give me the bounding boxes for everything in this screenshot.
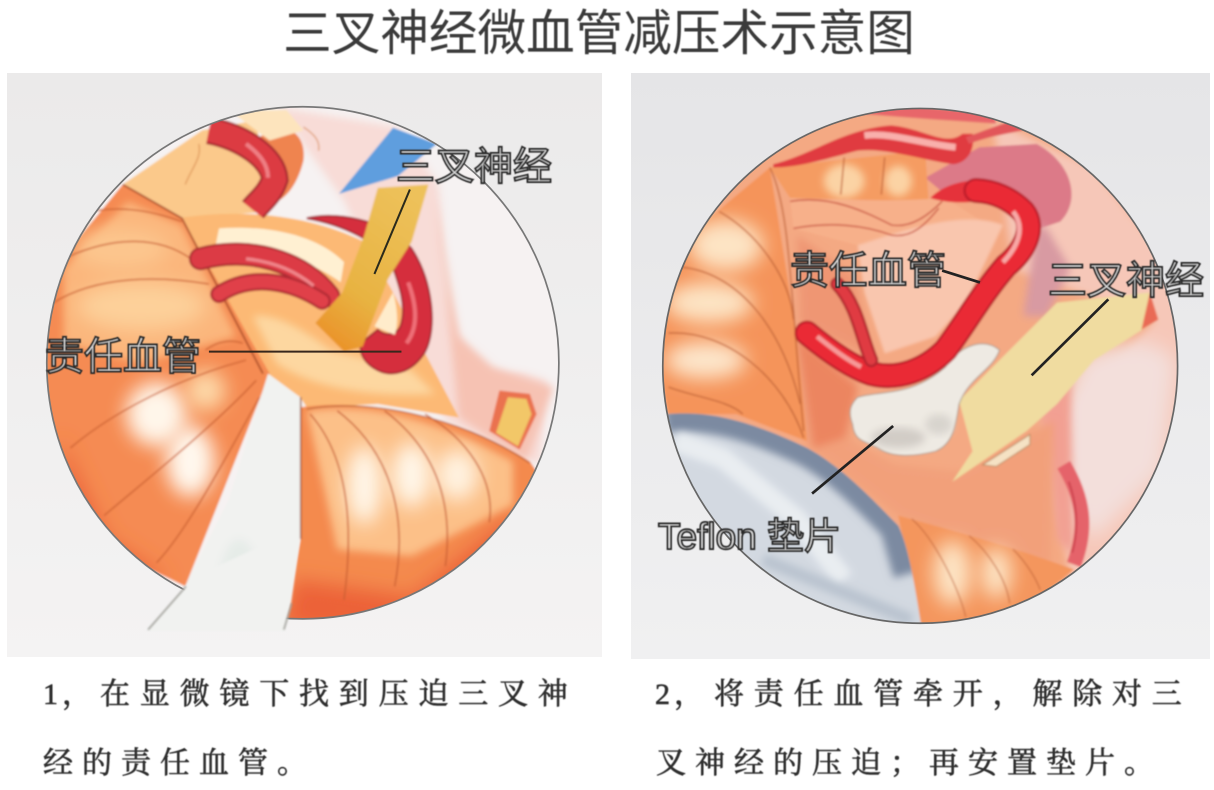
bottom right lobe: [287, 404, 536, 618]
right vessel loop: [307, 216, 432, 373]
small nerve stub: [489, 391, 537, 450]
caption: step 1: ，: [62, 678, 102, 711]
leader line: offending vessel: [942, 271, 980, 282]
bottom lobe: [898, 515, 1074, 630]
caption: step 1: [43, 678, 578, 780]
steel instrument: [668, 412, 922, 622]
central tan: [178, 214, 459, 418]
illustration: left microscope view: [40, 100, 570, 634]
label: offending vessel: 责任血管: [45, 336, 201, 379]
upper tissue: [770, 151, 929, 201]
mauve dome: [925, 144, 1072, 228]
caption: step 1: 在显微镜下找到压迫三叉神: [100, 678, 578, 711]
title: 三叉神经微血管减压术示意图: [283, 7, 915, 61]
caption: step 2: 叉神经的压迫；再安置垫片。: [656, 747, 1163, 780]
right pink tissue: [993, 120, 1189, 580]
label: trigeminal nerve: 三叉神经: [1048, 260, 1204, 303]
left lobe: [40, 184, 270, 586]
spatula: [262, 372, 302, 586]
caption: step 1: 1: [43, 678, 68, 711]
caption: step 1: 经的责任血管。: [43, 747, 316, 780]
teflon pad: [850, 344, 1000, 455]
top vessels: [209, 130, 275, 210]
panel: step 2 illustration: [631, 73, 1210, 659]
caption: step 2: 2: [655, 678, 680, 711]
leader line: offending vessel: [209, 349, 401, 355]
leader line: trigeminal nerve: [1032, 299, 1108, 375]
blue region: [339, 128, 437, 194]
label: trigeminal nerve: 三叉神经: [396, 146, 552, 189]
label: teflon pad: Teflon 垫片: [658, 516, 841, 557]
offending vessel: [930, 180, 972, 204]
nerve: [952, 293, 1158, 482]
middle vessels: [200, 254, 329, 296]
caption: step 2: 将责任血管牵开，解除对三: [714, 678, 1192, 711]
left lobes: [655, 168, 807, 441]
label: offending vessel: 责任血管: [790, 250, 946, 293]
leader line: teflon pad: [812, 426, 893, 494]
nerve: [315, 184, 428, 352]
thin vessels: [790, 200, 942, 236]
illustration: right microscope view: [655, 100, 1189, 630]
top vessels: [773, 125, 973, 168]
leader line: trigeminal nerve: [374, 190, 410, 274]
spatula overflow beyond circle: [146, 539, 300, 631]
lower right vessel: [1064, 465, 1082, 564]
caption: step 2: ，: [674, 678, 714, 711]
panel: step 1 illustration: [7, 73, 602, 657]
caption: step 2: [655, 678, 1192, 780]
